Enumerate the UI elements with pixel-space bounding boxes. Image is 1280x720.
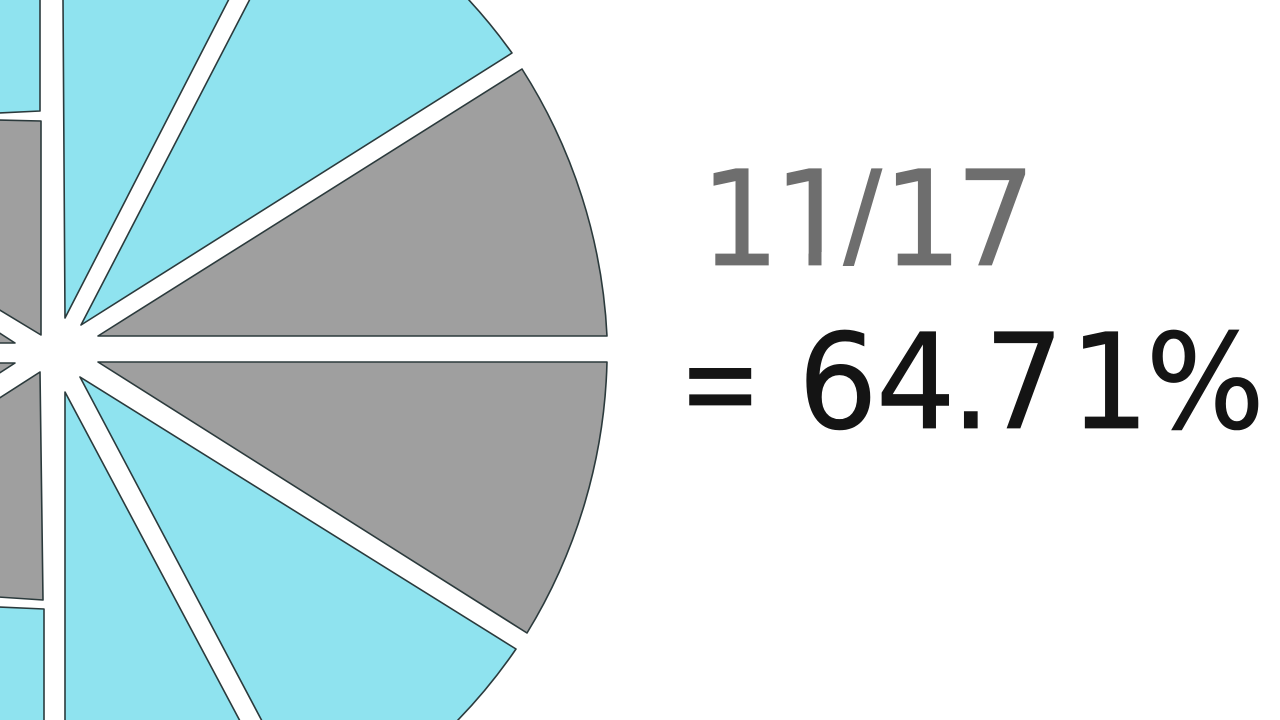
- slice: cyan lower right: [80, 377, 516, 720]
- slice: cyan upper right: [81, 0, 512, 325]
- slice: cyan lower middle: [65, 392, 240, 720]
- slice: cyan upper left: [0, 0, 40, 113]
- percentage result text: =: [679, 306, 762, 460]
- slice: gray lower left: [0, 372, 43, 600]
- slice: cyan lower left: [0, 607, 44, 720]
- slice: cyan upper middle: [63, 0, 229, 318]
- pie chart slices: [0, 0, 607, 720]
- slice: small gray lower sliver: [0, 363, 15, 374]
- fraction text: 11/17: [700, 144, 1035, 297]
- percentage result text: 64.71%: [798, 307, 1265, 460]
- slice: gray upper left: [0, 120, 41, 335]
- slice: small gray upper sliver: [0, 332, 15, 343]
- slice: gray upper right: [98, 69, 607, 336]
- slice: gray lower right: [98, 362, 607, 633]
